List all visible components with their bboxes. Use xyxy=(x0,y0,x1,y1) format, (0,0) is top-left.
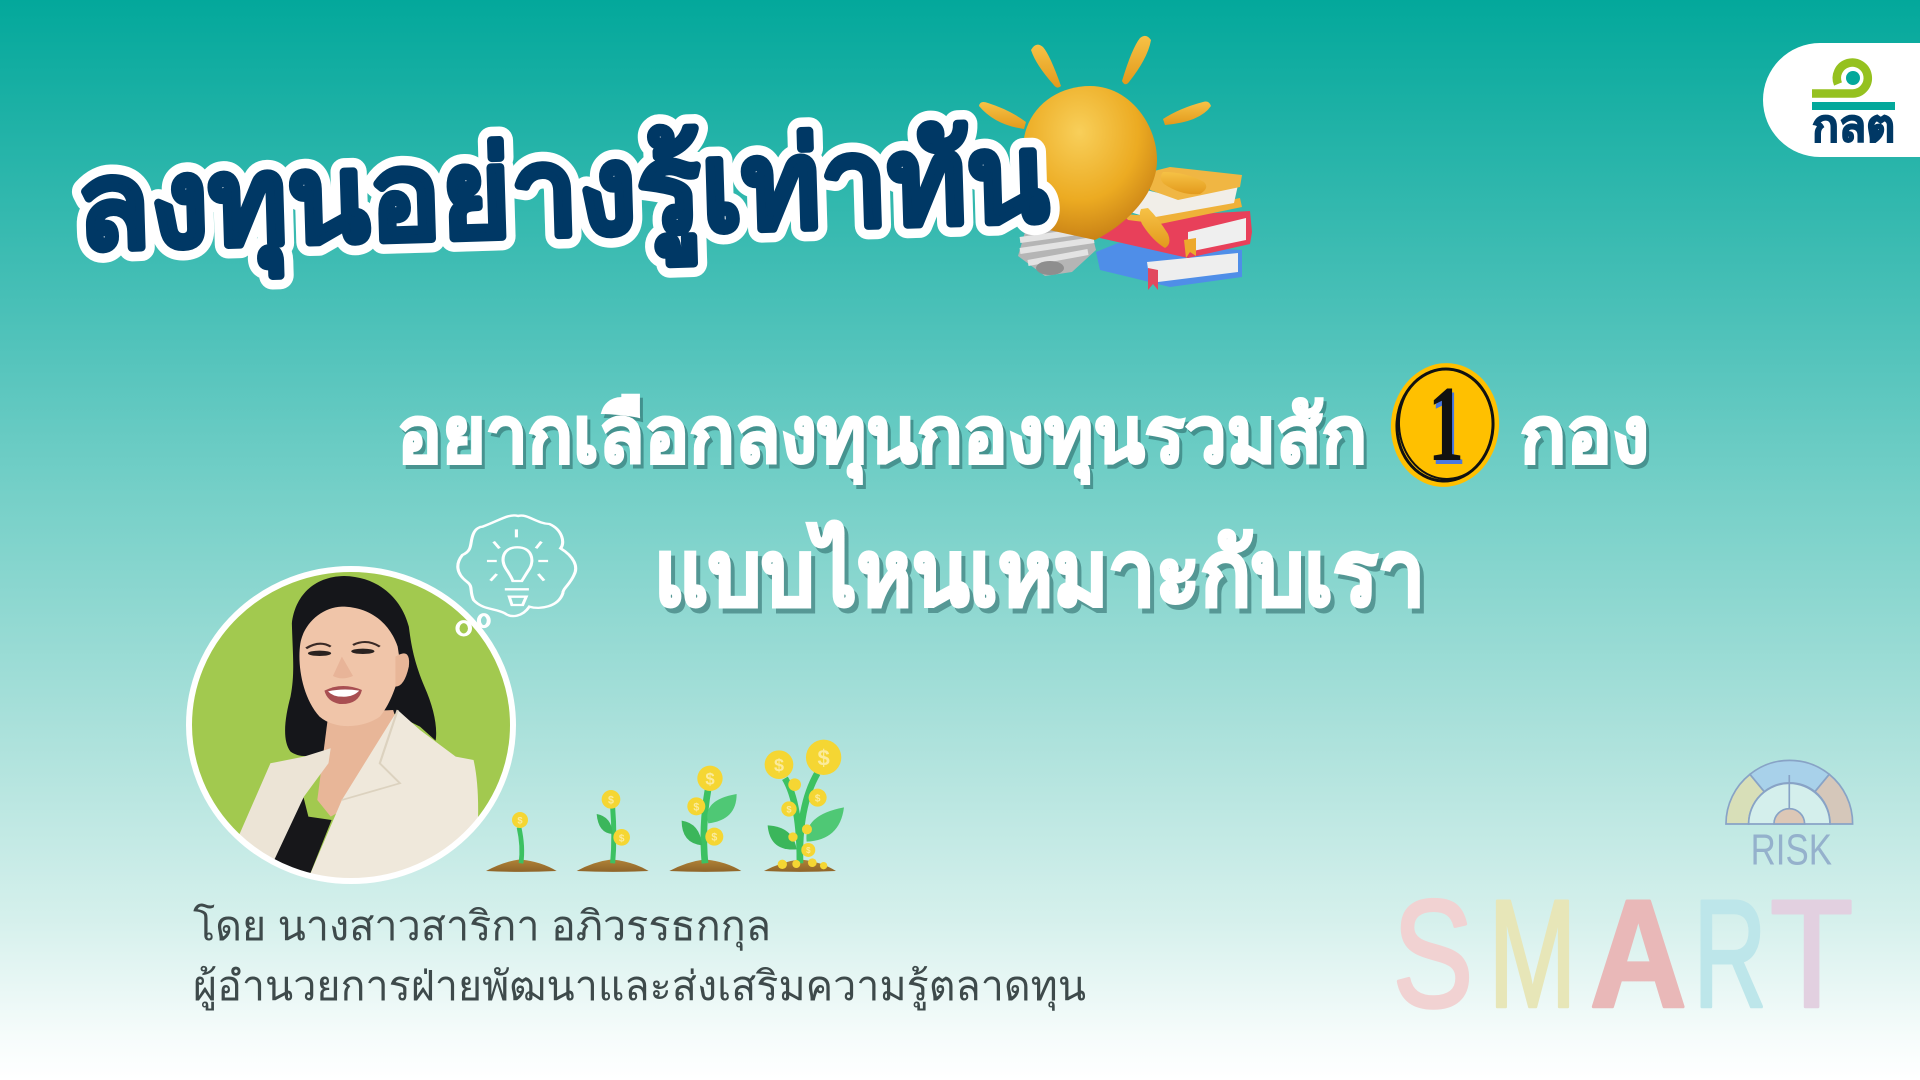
plant stage four: $ xyxy=(774,755,784,775)
SMART lettering: S xyxy=(1393,869,1473,1040)
plant stage two: $ xyxy=(608,794,614,806)
logo swirl mark xyxy=(1812,63,1895,110)
plant stage three: $ xyxy=(693,801,699,813)
title: ลงทุนอย่างรู้เท่าทัน xyxy=(75,109,1051,284)
plant stage three: $ xyxy=(711,832,717,844)
plant stage three xyxy=(669,766,741,872)
plant stage two: $ xyxy=(619,833,625,844)
logo background pill xyxy=(1763,43,1920,157)
plant stage four: $ xyxy=(818,745,830,770)
title: ลงทุนอย่างรู้เท่าทัน xyxy=(75,109,1051,284)
icon: bulb screw base xyxy=(1018,226,1096,276)
risk gauge xyxy=(1726,760,1853,875)
portrait background xyxy=(189,569,513,881)
portrait xyxy=(189,569,513,890)
person xyxy=(237,576,478,890)
SMART lettering: A xyxy=(1590,869,1687,1040)
SMART lettering: R xyxy=(1693,869,1767,1040)
icon: stack of books xyxy=(1096,167,1252,290)
plant stage four: $ xyxy=(806,846,811,855)
icon: bulb rays xyxy=(979,36,1211,248)
icon: thought bubble with light bulb xyxy=(457,515,576,635)
SMART lettering xyxy=(1393,869,1853,1040)
badge: number one xyxy=(1385,358,1505,492)
plant stage one: $ xyxy=(517,816,523,826)
heading line one: อยากเลือกลงทุนกองทุนรวมสัก xyxy=(397,391,1367,484)
plant stage four xyxy=(764,740,844,872)
portrait border xyxy=(189,569,513,881)
plant stage three: $ xyxy=(705,769,715,788)
gauge label: RISK xyxy=(1751,826,1832,875)
SMART lettering: T xyxy=(1770,869,1853,1040)
icon: growing money plants xyxy=(486,740,844,872)
plant stage one xyxy=(486,812,557,872)
logo wordmark: กลต xyxy=(1812,102,1895,151)
plant stage four: $ xyxy=(815,793,821,804)
plant stage four: $ xyxy=(786,804,792,814)
icon: bulb glass xyxy=(1023,86,1157,240)
presenter name: โดย นางสาวสาริกา อภิวรรธกกุล xyxy=(193,903,771,951)
SMART lettering: M xyxy=(1488,869,1577,1040)
icon: light bulb with books xyxy=(979,36,1252,290)
heading line two: แบบไหนเหมาะกับเรา xyxy=(654,521,1425,625)
heading word: fund: กอง xyxy=(1520,391,1649,479)
logo: SEC Thailand badge xyxy=(1763,43,1920,157)
presenter role: ผู้อำนวยการฝ่ายพัฒนาและส่งเสริมความรู้ตลาดทุน xyxy=(193,963,1086,1011)
gauge dial xyxy=(1726,760,1853,824)
plant stage two xyxy=(577,790,649,872)
badge: number one: 1 xyxy=(1428,365,1464,484)
badge: number one: 1 xyxy=(1430,369,1466,488)
